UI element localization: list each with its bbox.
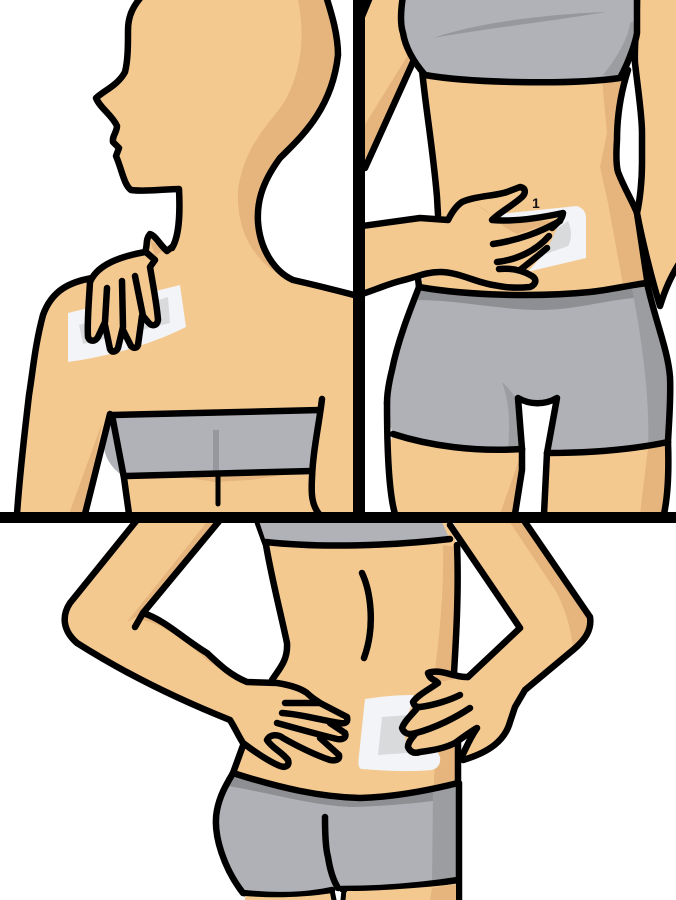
figure: torso back <box>228 518 458 805</box>
figure: left arm <box>65 518 347 767</box>
figure: upper left arm <box>364 0 413 172</box>
shorts: front view <box>387 278 670 453</box>
bra: back view <box>85 399 322 514</box>
bra: lower edge <box>258 518 450 546</box>
panel: abdomen patch <box>360 0 676 514</box>
hand: on abdomen <box>360 187 563 295</box>
figure: legs <box>387 403 668 514</box>
hand: on shoulder <box>88 234 172 352</box>
patch: lower back <box>358 695 440 771</box>
panel dividers <box>0 0 676 523</box>
figure: torso <box>417 70 648 300</box>
figure: right arm <box>402 518 590 760</box>
label: number one: 1 <box>532 195 540 211</box>
shorts: back view <box>216 773 459 900</box>
arm gap <box>88 450 126 512</box>
panel: lower back patch <box>65 518 590 900</box>
patch: shoulder <box>68 285 186 362</box>
bra: front view <box>401 0 637 82</box>
figure: head and back silhouette <box>17 0 354 514</box>
patch: abdomen <box>495 206 586 272</box>
panel: shoulder patch <box>17 0 354 514</box>
figure: right arm <box>635 0 676 307</box>
figure: legs below shorts <box>245 884 456 900</box>
